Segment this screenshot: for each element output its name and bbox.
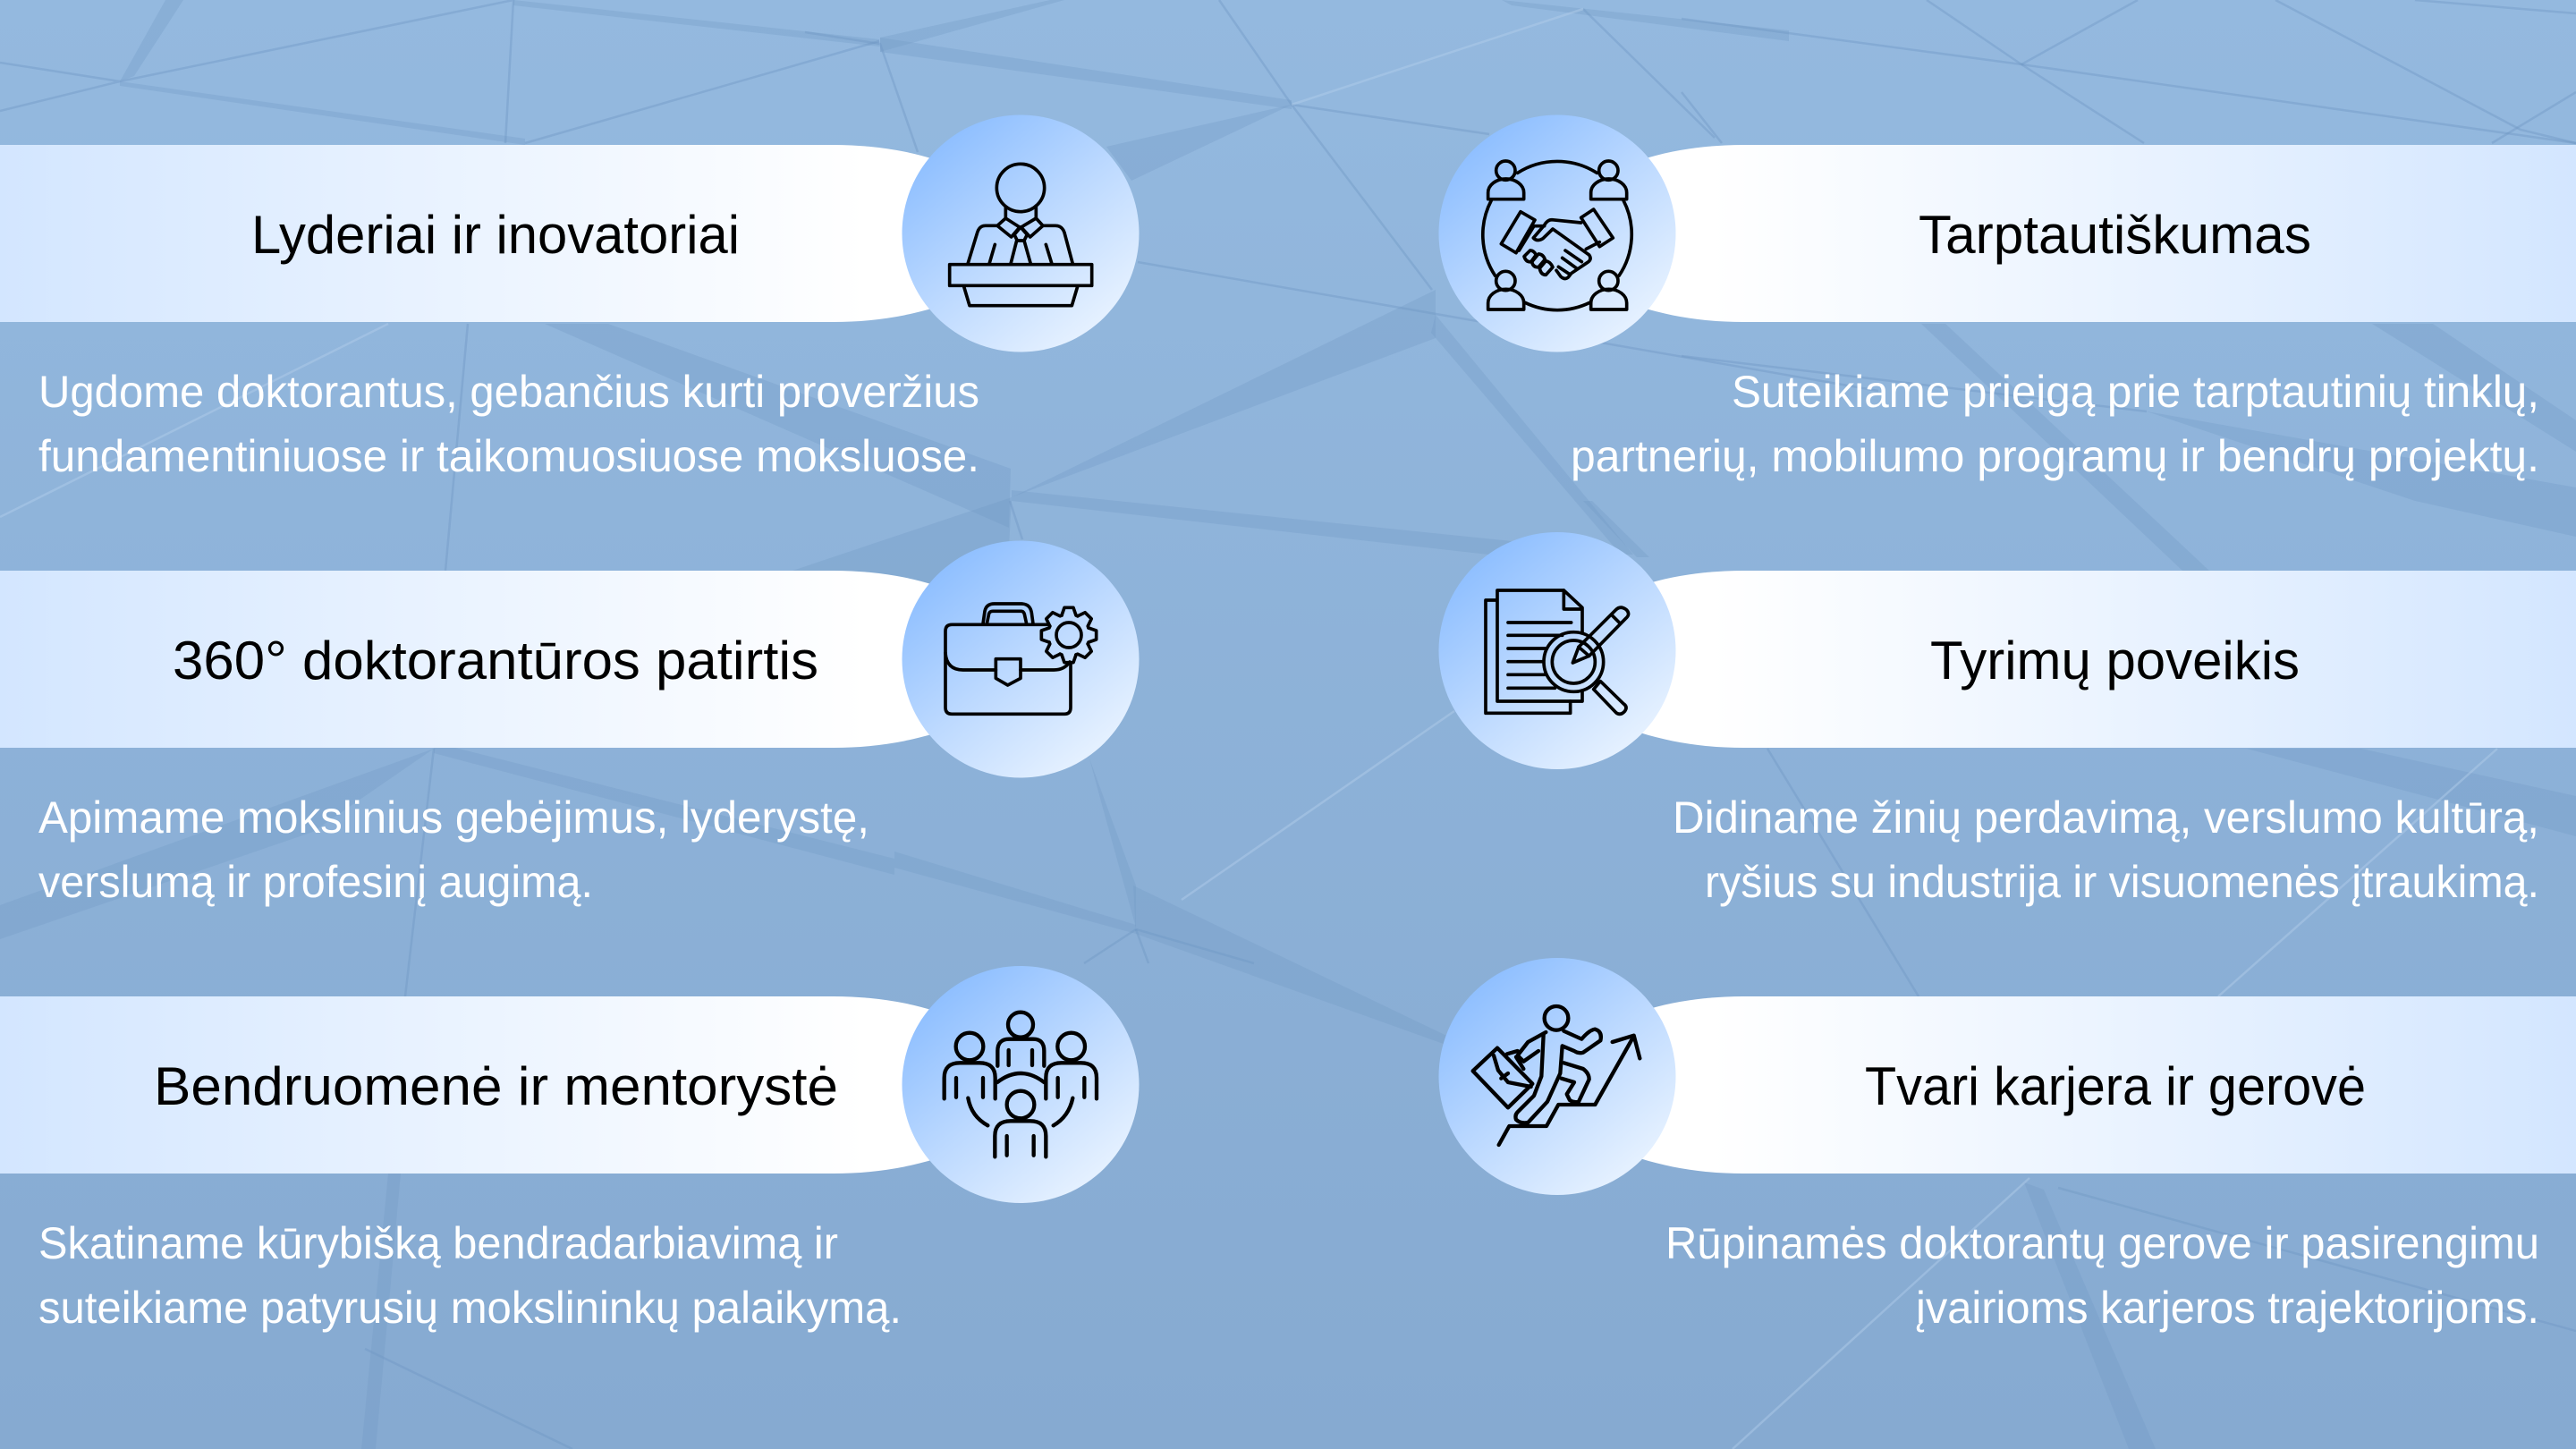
title bar bbox=[0, 571, 1018, 748]
title bar bbox=[0, 145, 1018, 322]
description: įvairioms karjeros trajektorijoms. bbox=[1916, 1283, 2539, 1333]
icon circle: handshake with people bbox=[1438, 114, 1676, 352]
description bbox=[1571, 367, 2539, 481]
icon circle: climber with briefcase and arrow bbox=[1438, 958, 1676, 1195]
description: ryšius su industrija ir visuomenės įtraukimą. bbox=[1705, 857, 2539, 907]
heading: Lyderiai ir inovatoriai bbox=[251, 205, 740, 265]
icon circle: group of people bbox=[902, 966, 1140, 1203]
description bbox=[1665, 1218, 2539, 1333]
description: Suteikiame prieigą prie tarptautinių tinklų, bbox=[1732, 367, 2539, 417]
description: partnerių, mobilumo programų ir bendrų projektų. bbox=[1571, 431, 2539, 481]
description: Apimame mokslinius gebėjimus, lyderystę, bbox=[38, 792, 869, 843]
title bar bbox=[1559, 145, 2576, 322]
description bbox=[38, 792, 869, 907]
title bar bbox=[1559, 996, 2576, 1174]
description bbox=[38, 367, 979, 481]
icon circle: document with magnifier and pencil bbox=[1438, 532, 1676, 769]
title bar bbox=[0, 996, 1018, 1174]
panel: 360° doktorantūros patirtis bbox=[0, 540, 1140, 907]
icon circle: briefcase with gear bbox=[902, 540, 1140, 778]
heading: Tarptautiškumas bbox=[1919, 205, 2311, 265]
panel: Tvari karjera ir gerovė bbox=[1438, 958, 2576, 1333]
description: Didiname žinių perdavimą, verslumo kultūrą, bbox=[1673, 792, 2539, 843]
description: fundamentiniuose ir taikomuosiuose moksluose. bbox=[38, 431, 979, 481]
description: Ugdome doktorantus, gebančius kurti proveržius bbox=[38, 367, 979, 417]
description bbox=[38, 1218, 902, 1333]
title bar bbox=[1559, 571, 2576, 748]
heading: Bendruomenė ir mentorystė bbox=[154, 1056, 838, 1116]
panel: Tarptautiškumas bbox=[1438, 114, 2576, 481]
icon circle: speaker at podium bbox=[902, 114, 1140, 352]
heading: Tyrimų poveikis bbox=[1930, 631, 2300, 691]
panel: Lyderiai ir inovatoriai bbox=[0, 114, 1140, 481]
description: Rūpinamės doktorantų gerove ir pasirengimu bbox=[1665, 1218, 2539, 1268]
panel: Tyrimų poveikis bbox=[1438, 532, 2576, 907]
heading: Tvari karjera ir gerovė bbox=[1865, 1056, 2366, 1116]
description: Skatiname kūrybišką bendradarbiavimą ir bbox=[38, 1218, 838, 1268]
description bbox=[1673, 792, 2539, 907]
description: verslumą ir profesinį augimą. bbox=[38, 857, 593, 907]
panel: Bendruomenė ir mentorystė bbox=[0, 966, 1140, 1333]
description: suteikiame patyrusių mokslininkų palaikymą. bbox=[38, 1283, 902, 1333]
heading: 360° doktorantūros patirtis bbox=[173, 631, 818, 691]
